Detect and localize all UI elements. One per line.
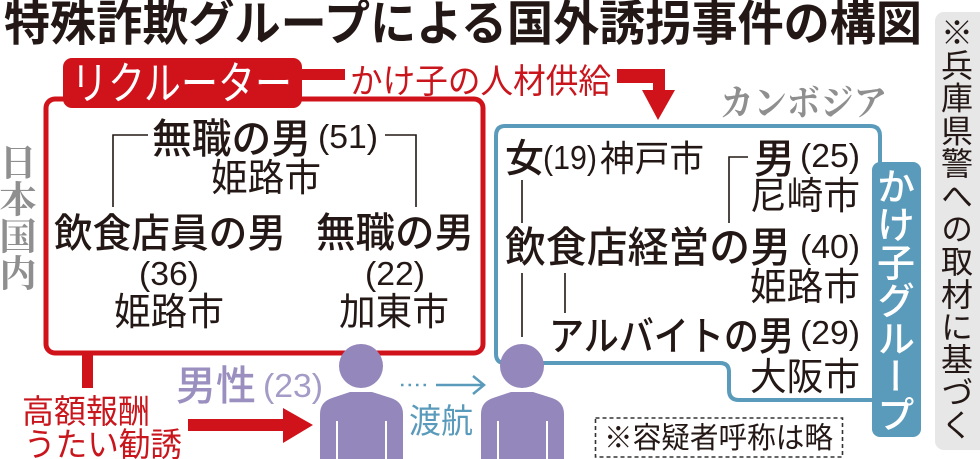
person: unemployed man 51: (51): [318, 118, 378, 155]
label: man 23: 男性: [176, 352, 256, 412]
person: restaurant employee 36: (36): [139, 255, 199, 292]
recruitment text: 高額報酬: [22, 385, 150, 433]
recruiter label: リクルーター: [71, 47, 292, 112]
arrow: recruitment: [188, 408, 313, 443]
panel: caller group in Cambodia: [496, 125, 924, 437]
person: unemployed man 51: 無職の男: [152, 105, 311, 165]
person: man 25: [750, 125, 860, 220]
recruitment text: [22, 385, 182, 459]
icon: person 2: [481, 344, 564, 459]
stem from recruiter box: [82, 354, 93, 388]
person: part-timer 29: [549, 304, 860, 401]
source note panel: ※兵庫県警への取材に基づく: [934, 16, 980, 441]
person: restaurant operator 40: (40): [800, 228, 860, 265]
person: restaurant employee 36: 姫路市: [114, 281, 224, 336]
note: honorifics omitted: ※容疑者呼称は略: [604, 415, 833, 457]
label: man 23: (23): [263, 367, 323, 404]
person: restaurant employee 36: 飲食店員の男: [54, 201, 286, 259]
person: unemployed man 51: 姫路市: [211, 147, 321, 202]
caller group label: かけ子グループ: [868, 167, 924, 433]
person: part-timer 29: (29): [800, 314, 860, 351]
person: unemployed man 22: [316, 199, 474, 336]
arrow: supply of callers: [302, 54, 675, 120]
label: man 23: [176, 352, 323, 412]
person: man 25: (25): [800, 137, 860, 174]
hierarchy lines: [113, 135, 416, 207]
person: unemployed man 22: 加東市: [339, 281, 449, 336]
label: Cambodia: カンボジア: [720, 75, 887, 126]
person: restaurant employee 36: [54, 201, 286, 336]
label: travel abroad: 渡航: [409, 394, 473, 443]
person: restaurant operator 40: 飲食店経営の男: [505, 214, 791, 275]
person: unemployed man 22: (22): [365, 255, 425, 292]
arrow: travel: [401, 376, 484, 394]
arrow: supply of callers: かけ子の人材供給: [350, 54, 611, 103]
person: woman 19: (19): [543, 139, 597, 176]
person: woman 19: [505, 128, 704, 184]
person: woman 19: 女: [505, 128, 544, 184]
person: unemployed man 22: 無職の男: [316, 199, 474, 259]
person: restaurant operator 40: 姫路市: [750, 256, 860, 311]
person: man 25: 尼崎市: [750, 165, 860, 220]
person: woman 19: 神戸市: [600, 130, 704, 182]
icon: person 1: [320, 344, 403, 459]
person: part-timer 29: アルバイトの男: [549, 304, 794, 362]
panel: recruiters in Japan: [46, 47, 483, 353]
person: restaurant operator 40: [505, 214, 860, 311]
hierarchy lines: [522, 157, 748, 337]
person: man 25: 男: [754, 125, 795, 185]
person: unemployed man 51: [152, 105, 378, 202]
person: part-timer 29: 大阪市: [750, 346, 860, 401]
